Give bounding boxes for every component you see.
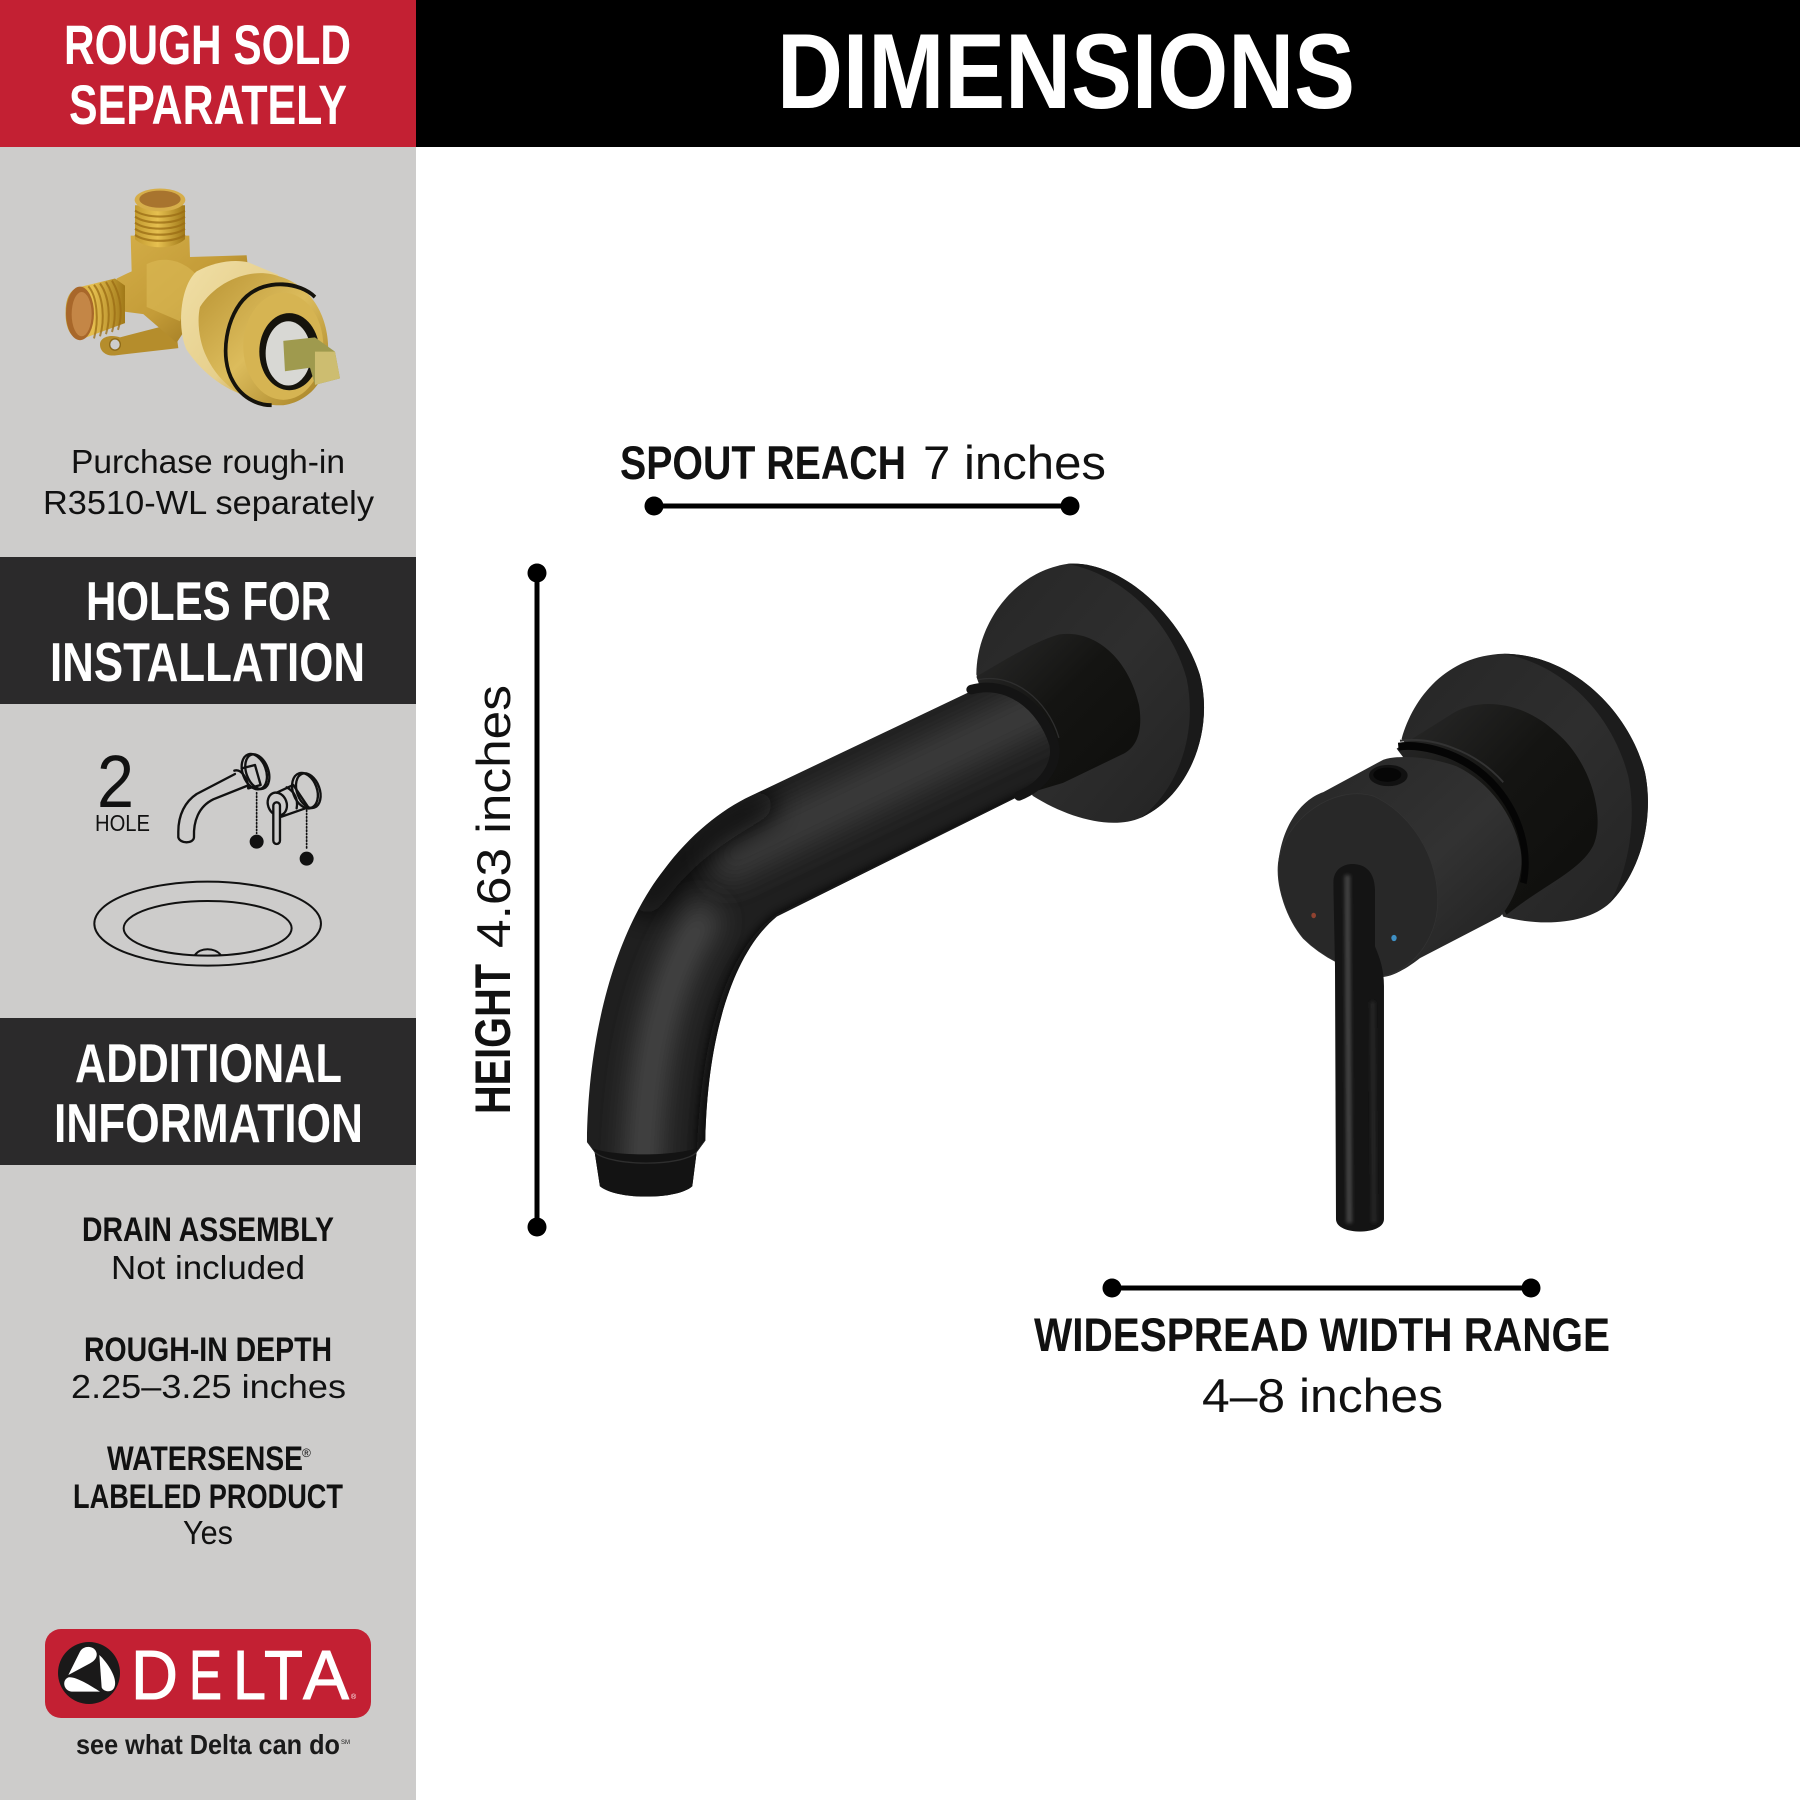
banner: rough sold separately xyxy=(0,0,416,147)
wordmark: delta: ® xyxy=(351,1693,357,1701)
text: rough-in depth xyxy=(71,1331,346,1405)
wordmark: delta: D xyxy=(131,1636,178,1714)
label: height: HEIGHT xyxy=(465,964,521,1114)
banner: holes for installation: HOLES FOR xyxy=(86,570,331,632)
handle front face xyxy=(1278,794,1438,976)
text: rough-in depth: 2.25–3.25 inches xyxy=(71,1368,346,1405)
banner: additional information: INFORMATION xyxy=(54,1092,363,1154)
title: dimensions xyxy=(416,0,1800,147)
text: watersense labeled product: Yes xyxy=(183,1514,233,1551)
dimension line: spout reach xyxy=(644,496,1080,516)
handle flange xyxy=(1402,654,1648,922)
wordmark: delta: A xyxy=(303,1636,349,1714)
text: see what delta can do: SM xyxy=(341,1740,350,1746)
banner: additional information: ADDITIONAL xyxy=(75,1032,342,1094)
dimension line: widespread width xyxy=(1102,1278,1540,1298)
banner: additional information xyxy=(0,1018,416,1165)
icon: 2 hole label xyxy=(95,740,150,836)
banner: holes for installation: INSTALLATION xyxy=(50,631,365,693)
text: see what delta can do: see what Delta can do xyxy=(76,1729,340,1760)
spout ring xyxy=(971,678,1059,796)
label: widespread width range: WIDESPREAD WIDTH RANGE xyxy=(1034,1308,1610,1361)
text: watersense labeled product: WATERSENSE xyxy=(107,1440,303,1478)
banner: holes for installation xyxy=(0,557,416,704)
spout flange xyxy=(976,564,1204,823)
label: height: 4.63 inches xyxy=(467,685,520,948)
wordmark: delta xyxy=(131,1636,357,1714)
text: purchase rough-in separately: Purchase rough-in xyxy=(71,443,345,480)
image: matte black wall spout xyxy=(560,564,1204,1212)
icon: 2 hole label: HOLE xyxy=(95,810,150,836)
dimension line: height xyxy=(528,564,546,1236)
image: brass rough-in valve xyxy=(66,188,340,405)
wordmark: delta: E xyxy=(189,1636,222,1714)
icon: two-hole faucet outline xyxy=(178,750,325,866)
spout body xyxy=(586,692,1050,1197)
icon: basin outline xyxy=(94,882,321,966)
handle knob xyxy=(1278,757,1522,977)
icon: delta triangle mark xyxy=(64,1647,115,1692)
text: purchase rough-in separately xyxy=(43,443,375,521)
handle groove xyxy=(1398,746,1525,883)
logo: delta xyxy=(45,1629,371,1718)
label: spout reach: SPOUT REACH xyxy=(620,436,906,489)
text: drain assembly: Not included xyxy=(111,1249,305,1286)
text: purchase rough-in separately: R3510-WL separately xyxy=(43,484,375,521)
label: widespread width range: 4–8 inches xyxy=(1202,1369,1443,1422)
handle lever xyxy=(1334,864,1384,1232)
image: matte black handle xyxy=(1278,654,1648,1239)
hot cold dots xyxy=(1311,913,1397,941)
title: dimensions: DIMENSIONS xyxy=(777,11,1355,131)
label: height xyxy=(465,685,521,1114)
wordmark: delta: L xyxy=(233,1636,266,1714)
icon: 2 hole label: 2 xyxy=(97,740,134,823)
label: widespread width range xyxy=(1034,1308,1610,1422)
text: rough-in depth: ROUGH-IN DEPTH xyxy=(84,1331,332,1369)
text: watersense labeled product: ® xyxy=(302,1446,311,1460)
handle neck xyxy=(1397,704,1598,915)
banner: rough sold separately: ROUGH SOLD xyxy=(64,13,351,76)
handle top hole xyxy=(1369,765,1408,786)
label: spout reach: 7 inches xyxy=(923,436,1106,489)
panel: left sidebar xyxy=(0,0,416,1800)
spout neck xyxy=(976,634,1140,796)
text: watersense labeled product: LABELED PRODUCT xyxy=(73,1478,343,1516)
wordmark: delta: T xyxy=(264,1636,303,1714)
text: watersense labeled product xyxy=(73,1440,343,1551)
banner: rough sold separately: SEPARATELY xyxy=(69,73,347,136)
text: drain assembly: DRAIN ASSEMBLY xyxy=(82,1211,334,1249)
text: drain assembly xyxy=(82,1211,334,1286)
